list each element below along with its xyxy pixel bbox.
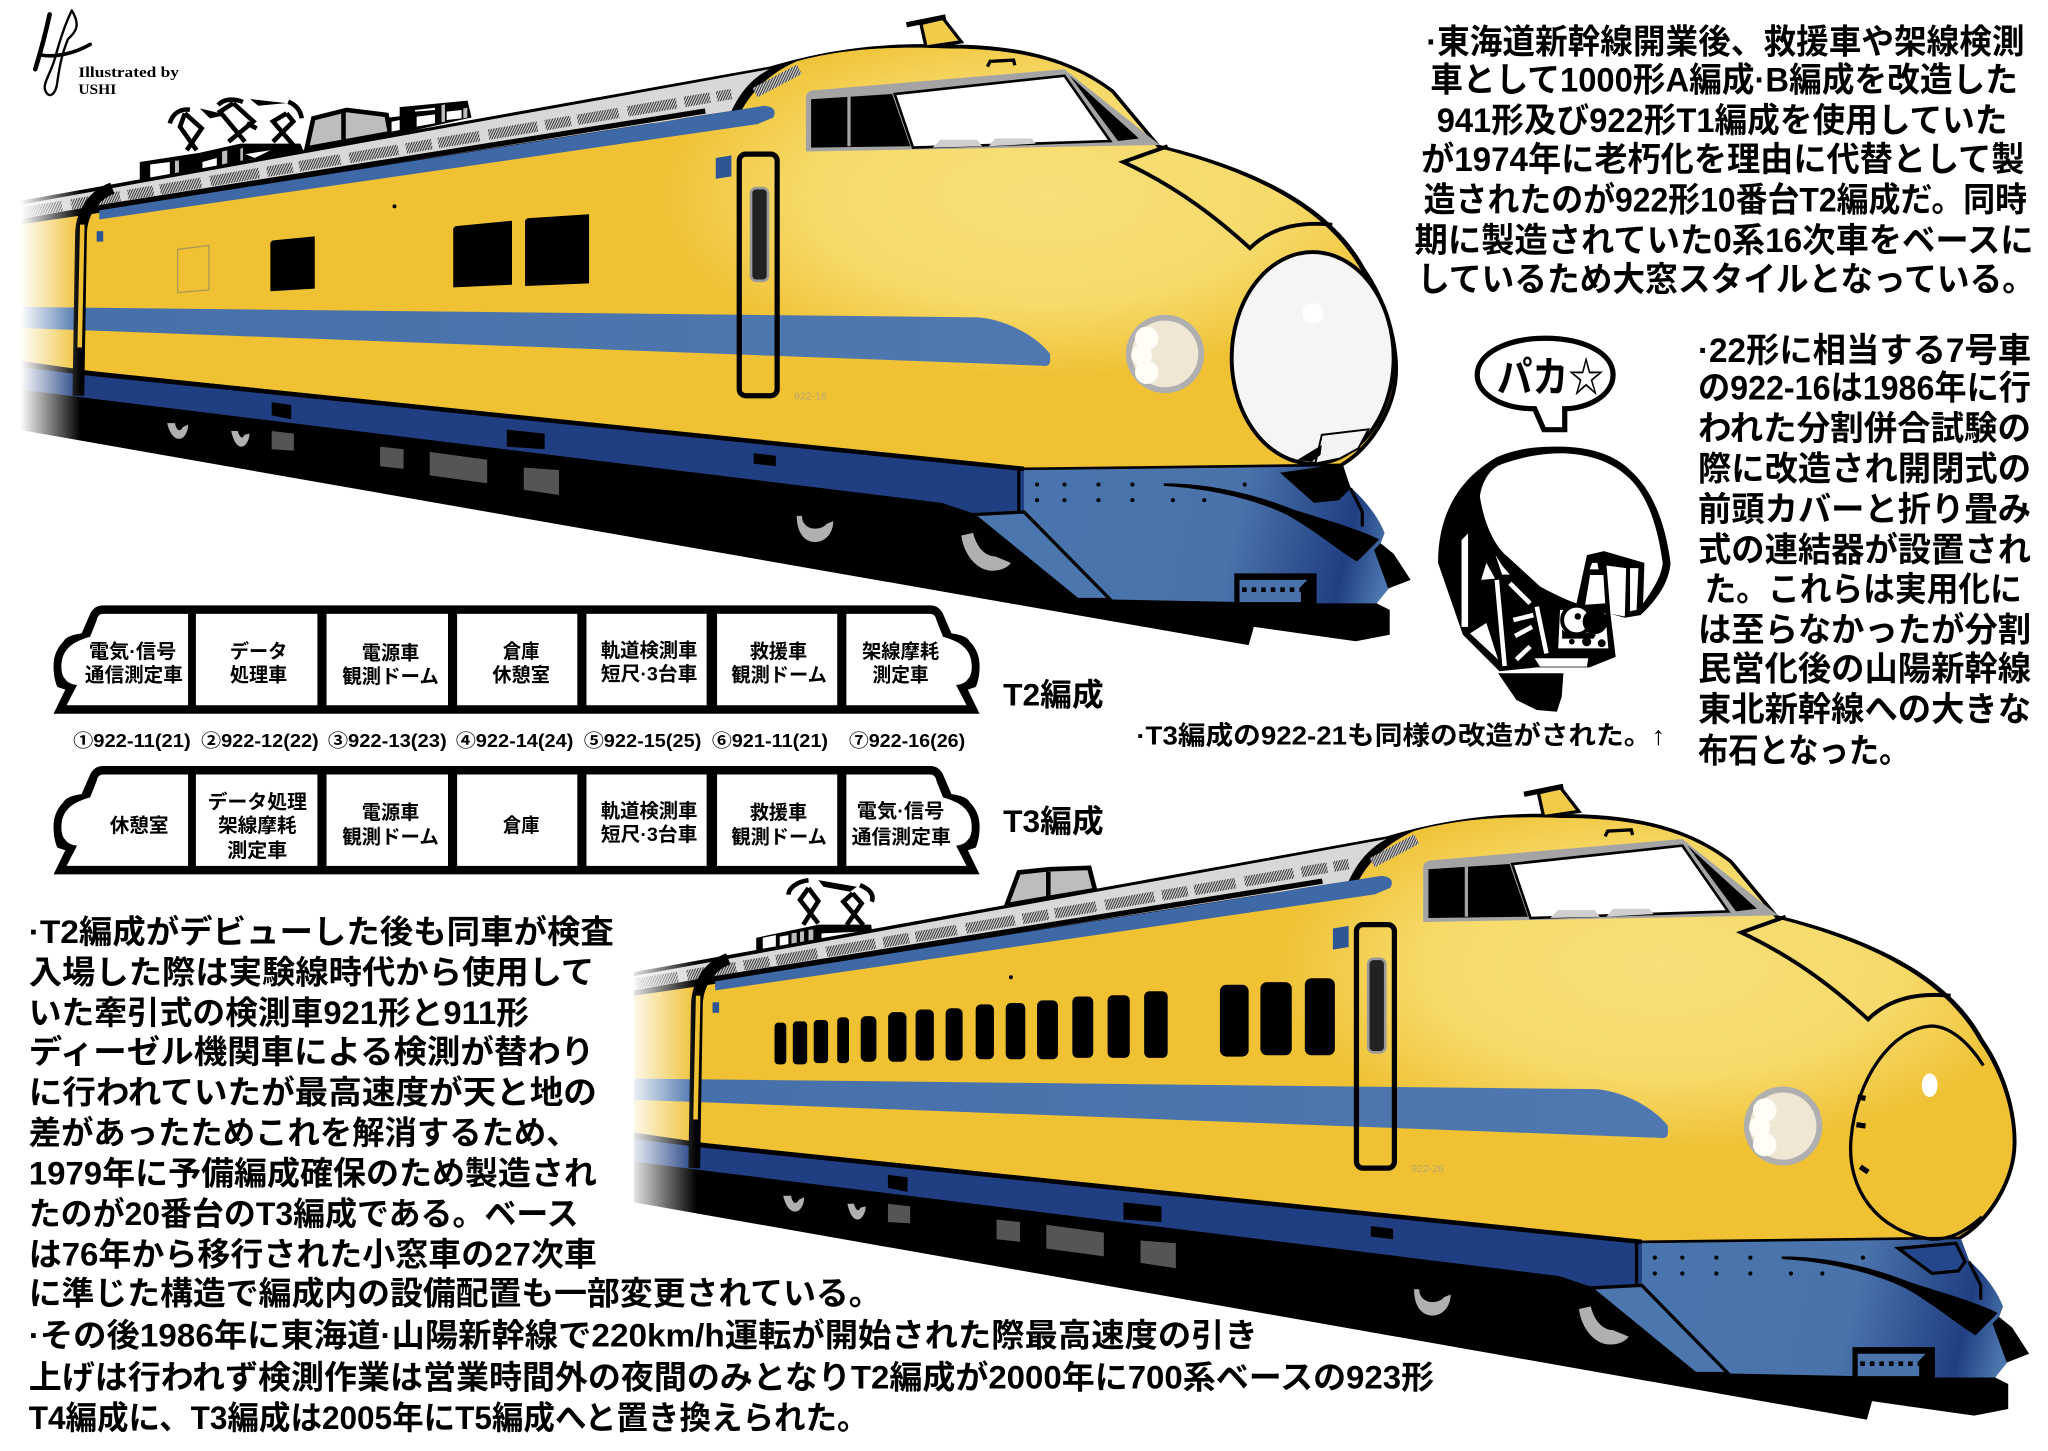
roof equipment box <box>307 110 390 148</box>
cab pillar <box>848 97 850 146</box>
car numbers row: ①922-11(21) <box>73 730 191 751</box>
train body silhouette <box>18 44 1411 645</box>
illustration: T3 train <box>603 786 2029 1420</box>
car labels: 倉庫 <box>503 641 539 663</box>
text block: right: 前頭カバーと折り畳み <box>1698 491 2031 529</box>
door window <box>1368 959 1385 1052</box>
car labels <box>85 640 940 688</box>
car numbers row: ③922-13(23) <box>328 730 447 751</box>
text block: top right: しているため大窓スタイルとなっている。 <box>1417 261 2035 299</box>
apron <box>1591 1285 1728 1374</box>
roof marker <box>987 60 1015 67</box>
signature <box>35 10 180 98</box>
roof blue stripe <box>99 106 775 219</box>
cover stripe <box>1607 566 1638 616</box>
text block: top right: 期に製造されていた0系16次車をベースに <box>1415 222 2034 260</box>
skirt line <box>18 364 1024 469</box>
car labels: 短尺·3台車 <box>601 663 697 685</box>
door window <box>751 188 768 281</box>
nose lobe line <box>1351 488 1362 526</box>
text block: bottom left: に準じた構造で編成内の設備配置も一部変更されている。 <box>29 1275 882 1312</box>
text block: right: ·22形に相当する7号車 <box>1698 332 2031 370</box>
car numbers row: ⑦922-16(26) <box>849 730 965 751</box>
car cells <box>61 614 972 705</box>
car labels: 通信測定車 <box>85 665 183 687</box>
car labels: 観測ドーム <box>342 827 439 849</box>
left fade <box>0 170 81 444</box>
base gaps <box>150 148 270 179</box>
text block: bottom left: 上げは行われず検測作業は営業時間外の夜間のみとなりT2編成が2000年に700系ベースの923形 <box>29 1358 1434 1395</box>
icon: open nose with coupler <box>1438 447 1671 712</box>
headlight <box>1126 315 1204 393</box>
roof blue stripe <box>715 876 1392 990</box>
nose seam <box>1635 1243 1638 1285</box>
roof rail <box>389 101 472 136</box>
bubble text: パカ☆ <box>1497 354 1604 401</box>
car labels: 倉庫 <box>503 815 539 837</box>
skirt line <box>634 1137 1642 1242</box>
nose rivets <box>1035 482 1247 502</box>
small wedges <box>1470 555 1510 660</box>
car labels: 救援車 <box>750 802 807 824</box>
body highlight <box>653 48 1394 418</box>
inspection door <box>178 246 209 293</box>
text block: bottom left: 1979年に予備編成確保のため製造され <box>29 1155 597 1192</box>
text block: right: 際に改造され開閉式の <box>1698 451 2031 489</box>
illustrator credit: Illustrated by <box>78 65 180 81</box>
pantograph heads <box>788 880 873 902</box>
skirt hatches <box>888 1175 1393 1239</box>
lower skirt <box>18 366 1024 513</box>
car labels: 電源車 <box>362 643 419 665</box>
text block: right: 民営化後の山陽新幹線 <box>1698 650 2031 688</box>
left strip <box>1462 533 1468 627</box>
roof edge line <box>634 881 1322 993</box>
nose seam <box>1018 470 1020 512</box>
antenna <box>1524 786 1579 817</box>
car labels: 軌道検測車 <box>601 801 697 823</box>
wipers <box>933 138 1036 148</box>
car number: 922-16 <box>794 392 827 403</box>
skirt hatches <box>272 402 776 466</box>
text block: bottom left: は76年から移行された小窓車の27次車 <box>29 1236 597 1273</box>
text block: top right: 造されたのが922形10番台T2編成だ。同時 <box>1424 182 2027 220</box>
car numbers row: ②922-12(22) <box>201 730 319 751</box>
car number: 922-26 <box>1411 1163 1444 1175</box>
pantograph base <box>140 144 304 185</box>
text block: bottom left: たのが20番台のT3編成である。ベース <box>29 1195 579 1232</box>
roof dot <box>1009 975 1013 979</box>
text block: bottom left: ·T2編成がデビューした後も同車が検査 <box>29 913 614 950</box>
car labels: 通信測定車 <box>852 827 951 849</box>
text block: top right: が1974年に老朽化を理由に代替として製 <box>1421 141 2024 179</box>
pantograph arms <box>180 103 293 150</box>
text block: top right: ·東海道新幹線開業後、救援車や架線検測 <box>1426 24 2024 62</box>
label: T2 formation: T2編成 <box>1003 677 1104 712</box>
main blue stripe <box>18 307 1050 366</box>
underfloor boxes <box>888 1204 1176 1268</box>
car labels: 電気·信号 <box>89 641 176 663</box>
car labels: 救援車 <box>750 641 807 663</box>
roof band <box>18 69 769 222</box>
bubble shape <box>1477 338 1613 430</box>
roof vents <box>637 839 1417 984</box>
formation diagram: T2 <box>54 605 980 714</box>
roof box <box>1007 868 1095 905</box>
text block: bottom left: ディーゼル機関車による検測が替わり <box>29 1033 594 1070</box>
train outline <box>54 766 980 874</box>
windshield <box>1512 846 1728 918</box>
coupler lattice <box>1497 580 1546 666</box>
text block: right: は至らなかったが分割 <box>1698 611 2031 649</box>
door mark <box>716 155 731 179</box>
pantograph shoe <box>818 880 857 892</box>
wheels <box>167 423 1011 571</box>
side cab window <box>1428 864 1528 918</box>
front swoosh <box>1164 483 1379 562</box>
car labels: データ <box>230 640 287 663</box>
text block: top right: 車として1000形A編成·B編成を改造した <box>1430 61 2018 99</box>
pantographs <box>756 880 873 956</box>
text block: right: の922-16は1986年に行 <box>1698 370 2031 408</box>
left fade <box>603 940 697 1217</box>
car labels: 観測ドーム <box>342 666 439 688</box>
main blue stripe <box>634 1079 1668 1138</box>
wipers <box>1550 909 1654 918</box>
nose lobe line <box>1969 1262 1981 1300</box>
text block: right: 布石となった。 <box>1698 733 1910 771</box>
windshield <box>895 76 1110 148</box>
text block: right: われた分割併合試験の <box>1698 410 2031 448</box>
car labels <box>110 790 951 862</box>
front vent box <box>1234 573 1317 605</box>
pantograph heads <box>170 100 302 128</box>
right cab window <box>1070 76 1139 141</box>
hood panel line <box>1123 146 1332 248</box>
yellow body <box>634 817 2013 1241</box>
door <box>1356 925 1394 1168</box>
pantograph arms <box>800 888 863 925</box>
car numbers row: ④922-14(24) <box>456 730 573 751</box>
dome opening <box>1480 453 1663 603</box>
train outline <box>54 605 980 714</box>
cover highlight <box>1922 1073 1938 1097</box>
car labels: 電気·信号 <box>857 801 944 823</box>
speech bubble <box>1477 338 1613 430</box>
train body silhouette <box>634 814 2029 1420</box>
right cab window <box>1688 846 1757 911</box>
text block: top right: 941形及び922形T1編成を使用していた <box>1437 102 2008 140</box>
front cover outline <box>1851 1026 1983 1239</box>
car labels: 架線摩耗 <box>218 814 297 837</box>
car labels: 処理車 <box>230 665 287 687</box>
text block: bottom left <box>29 913 1434 1436</box>
cover marks <box>1856 1097 1868 1172</box>
nose rivets <box>1653 1256 1865 1276</box>
gangway <box>78 188 112 396</box>
label: T3 formation: T3編成 <box>1003 804 1104 839</box>
roof vents <box>21 69 799 213</box>
headlight <box>1744 1087 1822 1166</box>
formation diagram: T3 <box>54 766 980 874</box>
body highlight <box>1270 817 2013 1191</box>
car labels: 観測ドーム <box>731 665 827 687</box>
text block: bottom left: ·その後1986年に東海道·山陽新幹線で220km/h運転が開始された際最高速度の引き <box>29 1317 1258 1354</box>
base gaps <box>763 929 858 952</box>
car labels: 休憩室 <box>492 665 550 687</box>
underfloor boxes <box>272 431 559 495</box>
car labels: 観測ドーム <box>731 827 827 849</box>
nose tab <box>1898 1243 1965 1273</box>
coupler cover <box>1280 464 1351 503</box>
large windows <box>1220 978 1335 1057</box>
car cells <box>61 774 972 866</box>
car labels: 測定車 <box>872 665 929 687</box>
text block: bottom left: 差があったためこれを解消するため、 <box>29 1114 579 1151</box>
car numbers row: ⑥921-11(21) <box>712 730 828 751</box>
text block: right <box>1698 332 2031 771</box>
lower bracket <box>1535 658 1588 667</box>
pantographs <box>140 99 304 185</box>
cab window frame <box>806 69 1160 151</box>
illustration: T2 train <box>0 17 1411 645</box>
coupler face <box>1558 606 1608 648</box>
wheels <box>783 1196 1629 1345</box>
roof edge line <box>18 111 705 222</box>
blue nose <box>1024 466 1388 603</box>
lower skirt <box>634 1138 1642 1287</box>
windows <box>270 204 589 291</box>
text block: right: た。これらは実用化に <box>1704 571 2022 609</box>
text block: bottom left: 入場した際は実験線時代から使用して <box>29 953 594 990</box>
door <box>739 154 777 396</box>
car numbers row: ⑤922-15(25) <box>584 730 701 751</box>
text block: right: 東北新幹線への大きな <box>1698 691 2031 729</box>
cab window frame <box>1423 839 1778 922</box>
note: T3 modification: ·T3編成の922-21も同様の改造がされた。↑ <box>1136 720 1665 750</box>
car numbers row <box>73 730 965 751</box>
pantograph shoes <box>200 99 287 118</box>
front vent box <box>1852 1347 1935 1379</box>
foot <box>1498 673 1563 712</box>
door mark <box>1333 926 1349 950</box>
car labels: 短尺·3台車 <box>601 824 697 846</box>
car labels: データ処理 <box>208 790 307 813</box>
text block: bottom left: いた牽引式の検測車921形と911形 <box>29 994 529 1031</box>
text block: top right <box>1415 24 2035 299</box>
car labels: 架線摩耗 <box>862 640 940 663</box>
blue nose <box>1642 1239 2007 1377</box>
front cover <box>1232 252 1394 464</box>
small windows <box>775 991 1168 1064</box>
gangway <box>694 959 728 1168</box>
roof band <box>634 839 1387 993</box>
text block: bottom left: T4編成に、T3編成は2005年にT5編成へと置き換えられた。 <box>29 1399 869 1436</box>
housing column <box>1585 563 1605 605</box>
text block: bottom left: に行われていたが最高速度が天と地の <box>29 1074 597 1111</box>
apron <box>973 512 1110 599</box>
side cab window <box>811 94 910 148</box>
yellow body <box>18 48 1394 468</box>
illustrator credit: USHI <box>78 82 117 98</box>
front swoosh <box>1782 1256 1998 1335</box>
small mark <box>97 231 103 242</box>
illustrator credit <box>78 65 180 98</box>
text block: right: 式の連結器が設置され <box>1698 532 2031 570</box>
cab pillar <box>1465 867 1468 917</box>
small mark <box>713 1002 719 1013</box>
hood panel line <box>1741 917 1951 1019</box>
pantograph base <box>756 925 872 956</box>
antenna <box>906 17 961 47</box>
car labels: 軌道検測車 <box>601 640 697 662</box>
signature mark <box>35 10 90 95</box>
roof marker <box>1605 830 1633 836</box>
car labels: 休憩室 <box>110 815 168 837</box>
car labels: 測定車 <box>227 840 287 862</box>
car labels: 電源車 <box>362 802 419 824</box>
cover outline and body <box>1438 447 1671 671</box>
